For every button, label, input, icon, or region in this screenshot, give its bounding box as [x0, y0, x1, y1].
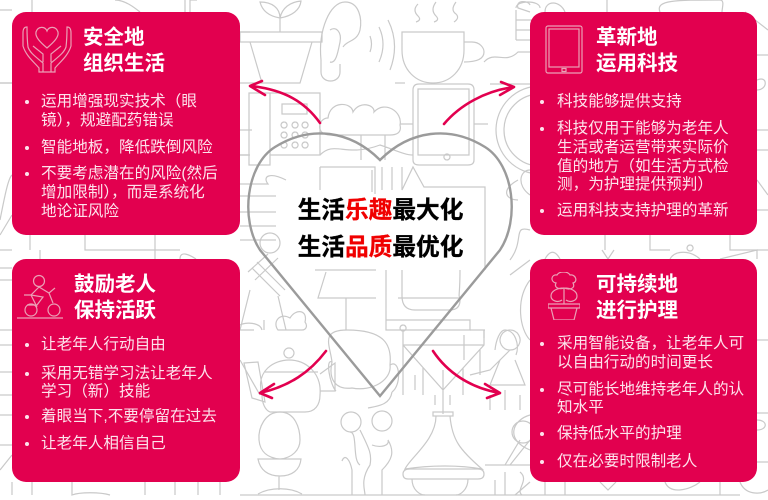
bullet list: 保持低水平的护理 [557, 425, 682, 442]
icon: hands holding heart [22, 26, 72, 73]
headline line 2: 生活品质最优化 [298, 235, 463, 261]
panel title: 运用科技 [596, 52, 678, 74]
bullet list: 科技仅用于能够为老年人 [557, 120, 729, 137]
icon: potted clover [548, 272, 580, 320]
bullet list: 测，为护理提供预判） [557, 176, 713, 193]
bullet list: 着眼当下,不要停留在过去 [41, 408, 217, 425]
bullet list: 让老年人行动自由 [41, 336, 166, 353]
panel title: 可持续地 [596, 273, 678, 296]
bullet list: 镜），规避配药错误 [41, 112, 174, 129]
panel: encourage elderly to stay active [12, 259, 240, 482]
bullet list: 生活或者运营带来实际价 [557, 139, 729, 156]
icon: person on exercise bike [17, 274, 63, 319]
panel title: 进行护理 [596, 298, 678, 322]
headline line 1: 生活乐趣最大化 [298, 198, 463, 224]
bullet list: 尽可能长地维持老年人的认 [557, 381, 744, 398]
panel title [596, 26, 678, 74]
panel title: 鼓励老人 [74, 273, 156, 296]
bullet list: 地论证风险 [41, 203, 119, 220]
bullet list: 以自由行动的时间更长 [557, 354, 713, 371]
bullet list: 科技能够提供支持 [557, 93, 682, 110]
bullet list [25, 336, 217, 452]
bullet list: 学习（新）技能 [41, 383, 150, 400]
panel: safely organise life [12, 12, 240, 235]
bullet list: 运用增强现实技术（眼 [41, 93, 197, 110]
panel: sustainable care [530, 259, 757, 482]
bullet list [25, 92, 218, 220]
bullet list: 让老年人相信自己 [41, 435, 166, 452]
bullet list: 智能地板，降低跌倒风险 [41, 139, 213, 156]
panel: innovative use of technology [530, 12, 757, 235]
bullet list: 值的地方（如生活方式检 [557, 158, 729, 175]
bullet list [540, 92, 729, 219]
bullet list: 知水平 [557, 399, 604, 416]
panel title: 安全地 [83, 26, 144, 49]
panel title [83, 26, 165, 74]
bullet list: 仅在必要时限制老人 [557, 453, 697, 470]
bullet list: 运用科技支持护理的革新 [557, 202, 729, 219]
bullet list: 采用无错学习法让老年人 [41, 365, 213, 382]
bullet list: 采用智能设备，让老年人可 [557, 335, 744, 352]
icon: tablet [545, 25, 583, 74]
panel title [596, 273, 678, 322]
panel title [74, 273, 156, 322]
bullet list: 增加限制），而是系统化 [41, 184, 205, 201]
panel title: 革新地 [596, 26, 658, 49]
panel title: 保持活跃 [74, 298, 156, 322]
bullet list [540, 334, 744, 470]
bullet list: 不要考虑潜在的风险(然后 [41, 165, 218, 182]
panel title: 组织生活 [83, 52, 165, 74]
headline [290, 194, 471, 266]
